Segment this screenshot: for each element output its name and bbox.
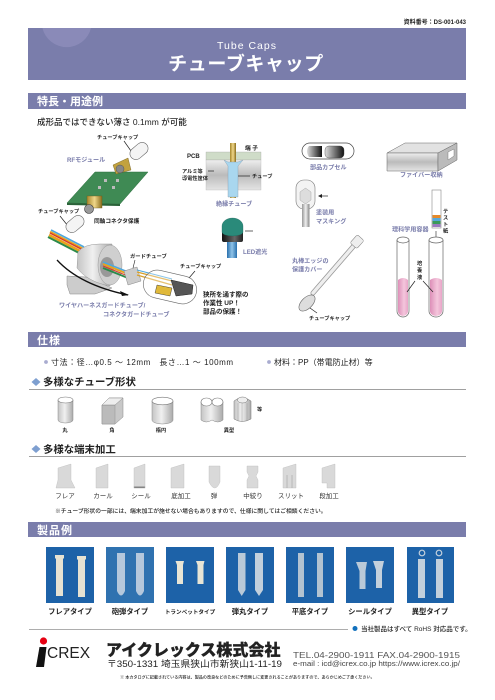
illustration: round edge cover: チューブキャップ xyxy=(309,314,351,322)
end: seal xyxy=(131,464,151,500)
illustration: LED shading: LED遮光 xyxy=(243,248,267,256)
product: seal type xyxy=(346,547,394,616)
illustration: RF module: チューブキャップ xyxy=(38,207,80,215)
illustration: RF module: 同軸コネクタ保護 xyxy=(94,217,140,225)
illustration: insulation tube: 端 子 xyxy=(245,144,258,152)
illustration: round edge cover: 丸棒エッジの xyxy=(292,257,329,265)
illustration: fiber storage: ファイバー収納 xyxy=(400,171,443,179)
illustration: wire harness guard tube: 作業性 UP！ xyxy=(203,298,240,307)
end: bottom xyxy=(171,464,191,500)
company name and address xyxy=(106,640,282,669)
feature lead text: 成形品ではできない薄さ 0.1mm が可能 xyxy=(37,117,187,127)
illustration: wire harness guard tube: ガードチューブ xyxy=(130,252,167,260)
illustration: lab containers: 液 xyxy=(417,273,423,281)
end: step xyxy=(319,464,339,500)
heading: end processing: 多様な端末加工 xyxy=(43,443,116,456)
illustration: paint masking: マスキング xyxy=(316,218,346,226)
product: round bottom type xyxy=(106,547,154,616)
illustration: insulation tube: 絶縁チューブ xyxy=(216,200,252,208)
company name and address: アイクレックス株式会社 xyxy=(106,640,280,660)
illustration: paint masking xyxy=(296,180,346,227)
end: neck: 中絞り xyxy=(243,491,263,500)
illustration: fiber storage xyxy=(387,143,457,179)
shape: irregular: 等 xyxy=(257,405,262,413)
illustration: round edge cover: 保護カバー xyxy=(292,266,322,274)
illustration: component capsule: 部品カプセル xyxy=(310,164,347,172)
illustration: insulation tube xyxy=(182,143,273,208)
end: slit: スリット xyxy=(278,492,304,500)
end: flare: フレア xyxy=(55,492,75,500)
company name and address: 〒350-1331 埼玉県狭山市新狭山1-11-19 xyxy=(107,658,282,669)
end types row xyxy=(55,464,339,500)
product: flare type: フレアタイプ xyxy=(48,607,93,616)
shape: round xyxy=(58,397,73,434)
company logo xyxy=(36,637,91,667)
end: slit xyxy=(278,464,304,500)
title banner xyxy=(28,28,466,80)
title banner: チューブキャップ xyxy=(168,52,324,75)
spec text: material: 材料：PP（帯電防止材）等 xyxy=(274,357,373,367)
illustration: wire harness guard tube: チューブキャップ xyxy=(180,262,222,270)
end processing note: ※チューブ形状の一部には、端末加工が施せない場合もありますので、仕様に関してはご相談ください。 xyxy=(55,507,327,515)
section bar: product examples: 製品例 xyxy=(37,523,73,537)
document number: 資料番号：DS-001-043 xyxy=(404,18,467,26)
illustration: LED shading xyxy=(222,218,267,258)
illustration: lab containers: テ xyxy=(443,208,448,215)
illustration: insulation tube: アルミ等 xyxy=(182,167,203,175)
illustration: insulation tube: チューブ xyxy=(252,172,273,180)
illustration: lab containers: 紙 xyxy=(443,226,449,234)
contact details: e-mail : icd@icrex.co.jp https://www.icrex.co.jp/ xyxy=(293,661,460,668)
illustration: wire harness guard tube: ワイヤハーネスガードチューブ/ xyxy=(59,302,146,310)
end: bullet xyxy=(209,466,220,500)
illustration: wire harness guard tube xyxy=(48,230,249,318)
end: curl: カール xyxy=(93,492,113,500)
product: flat bottom type xyxy=(286,547,334,616)
illustration: wire harness guard tube: コネクタガードチューブ xyxy=(103,310,169,318)
section bar: specifications: 仕様 xyxy=(37,333,61,347)
contact details: TEL.04-2900-1911 FAX.04-2900-1915 xyxy=(293,650,460,660)
illustration: lab containers xyxy=(392,190,449,317)
end: curl xyxy=(93,464,113,500)
illustration: lab containers: ス xyxy=(443,214,448,222)
heading: tube shapes: 多様なチューブ形状 xyxy=(43,376,137,388)
illustration: lab containers: 培 xyxy=(417,259,423,267)
illustration: lab containers: ト xyxy=(443,222,448,228)
illustration: wire harness guard tube: 部品の保護！ xyxy=(203,306,242,316)
illustration: paint masking: 塗装用 xyxy=(316,208,334,216)
heading: tube shapes xyxy=(29,376,466,390)
RoHS note: 当社製品はすべて RoHS 対応品です。 xyxy=(361,624,472,633)
RoHS note xyxy=(29,624,472,633)
product: bullet type: 弾丸タイプ xyxy=(232,607,269,616)
product: bullet type xyxy=(226,547,274,616)
product: seal type: シールタイプ xyxy=(348,607,393,616)
contact details xyxy=(293,650,460,668)
illustration: RF module: RFモジュール xyxy=(67,157,105,164)
company logo: CREX xyxy=(47,645,91,662)
illustration: wire harness guard tube: 狭所を通す際の xyxy=(203,290,249,298)
end: step: 段加工 xyxy=(319,491,339,500)
end: bullet: 弾 xyxy=(211,491,218,500)
section bar: features xyxy=(28,93,466,109)
illustration: RF module xyxy=(38,133,151,235)
illustration: component capsule xyxy=(302,143,354,172)
product: flat bottom type: 平底タイプ xyxy=(292,607,329,616)
product: trumpet type: トランペットタイプ xyxy=(165,608,216,616)
product: irregular type: 異型タイプ xyxy=(412,607,449,616)
illustration: insulation tube: 導電性筐体 xyxy=(182,174,209,182)
end: bottom: 底加工 xyxy=(171,491,191,500)
footer note: ※ 本カタログに記載されている内容は、製品の改良などのために予告無しに変更されることがありますので、あらかじめご了承ください。 xyxy=(120,674,375,680)
product: flare type xyxy=(46,547,94,616)
illustration: lab containers: 理科学用容器 xyxy=(392,226,429,234)
spec text: dimensions: 寸法：径…φ0.5 ～ 12mm 長さ…1 ～ 100mm xyxy=(51,357,233,367)
shape: ellipse xyxy=(152,397,173,434)
end: seal: シール xyxy=(131,493,151,500)
shape: round: 丸 xyxy=(62,426,68,434)
shape: irregular: 異型 xyxy=(224,426,234,434)
product: irregular type xyxy=(407,547,454,616)
product: round bottom type: 砲弾タイプ xyxy=(112,607,149,616)
shape: ellipse: 楕円 xyxy=(156,426,166,434)
illustration: round edge cover xyxy=(292,235,364,322)
illustration: insulation tube: PCB xyxy=(187,154,200,160)
heading: end processing xyxy=(29,443,466,457)
illustration: lab containers: 養 xyxy=(417,266,423,274)
shape: square xyxy=(102,398,123,434)
end: neck xyxy=(243,466,263,500)
section bar: product examples xyxy=(28,522,466,537)
title banner: Tube Caps xyxy=(217,40,277,52)
shape: irregular xyxy=(201,397,262,434)
end: flare xyxy=(55,464,75,500)
shape: square: 角 xyxy=(109,426,115,434)
illustration: RF module: チューブキャップ xyxy=(97,133,139,141)
section bar: features: 特長・用途例 xyxy=(37,94,103,108)
product: trumpet type xyxy=(165,547,216,616)
section bar: specifications xyxy=(28,332,466,347)
